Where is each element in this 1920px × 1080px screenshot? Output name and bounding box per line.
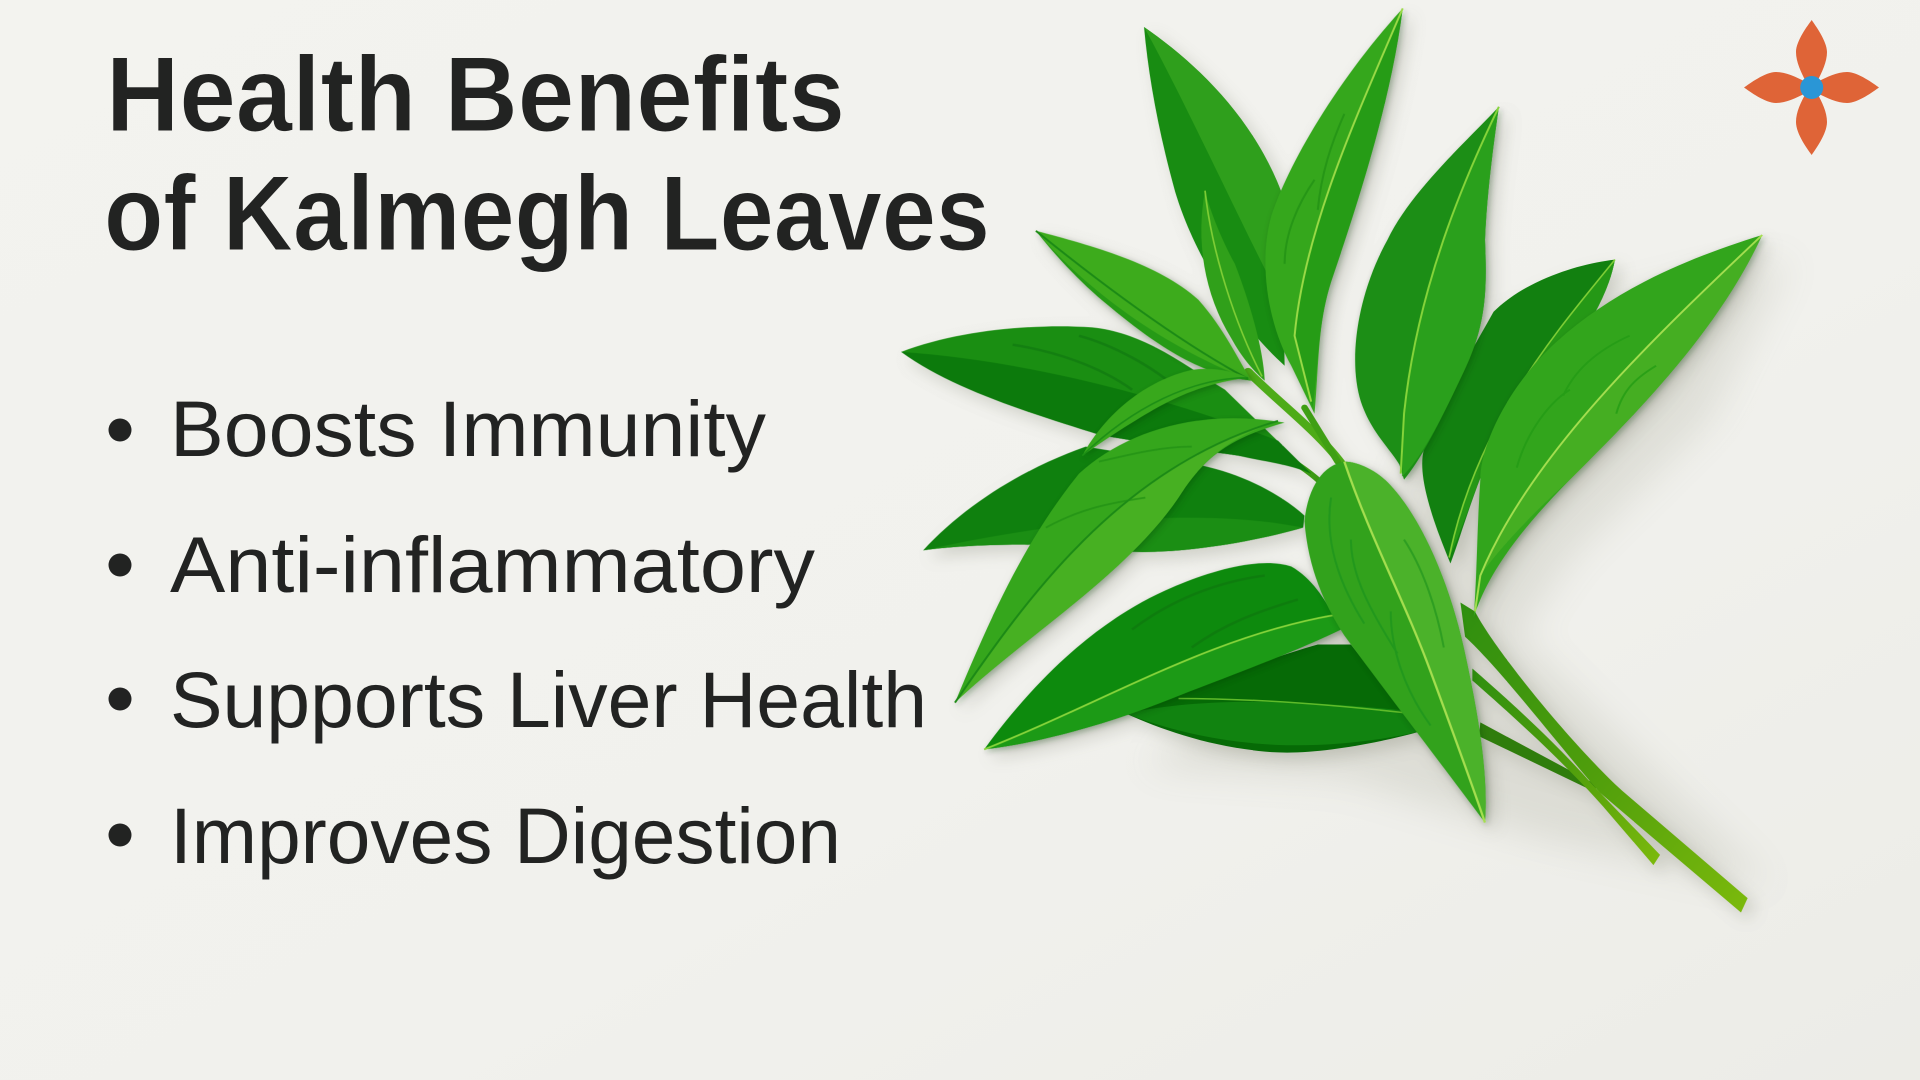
soft cast shadow: [1145, 258, 1789, 887]
leaf: top left long: [1144, 27, 1285, 366]
petal: right: [1817, 72, 1879, 103]
petal: top: [1796, 20, 1827, 82]
item: anti-inflammatory: Anti-inflammatory: [170, 520, 816, 609]
logo: orange four-petal flower: [1744, 20, 1879, 155]
title: Health Benefits: [106, 34, 845, 154]
title: of Kalmegh Leaves: [104, 153, 990, 273]
plant: kalmegh sprig: [901, 8, 1762, 912]
leaf: upper left: [1036, 231, 1251, 381]
leaf: back bottom: [1125, 644, 1421, 753]
item: boosts immunity: Boosts Immunity: [170, 384, 767, 473]
leaf: small center: [1082, 369, 1248, 456]
leaf: narrow upright: [1201, 191, 1265, 381]
item: supports liver health: Supports Liver Health: [170, 655, 927, 744]
leaf: upper right-center: [1355, 107, 1499, 480]
petal: bottom: [1796, 93, 1827, 155]
logo center dot: [1800, 76, 1823, 99]
leaf: back right dark: [1422, 260, 1615, 564]
petal: left: [1744, 72, 1806, 103]
item: improves digestion: Improves Digestion: [170, 791, 841, 880]
upper stems: [1241, 372, 1341, 481]
leaf: far left top: [901, 326, 1311, 474]
leaf: far left lower: [923, 447, 1305, 552]
leaf: right large: [1474, 235, 1762, 617]
title: [104, 34, 990, 273]
leaf: big left: [955, 418, 1285, 703]
lower stems: [1460, 602, 1748, 912]
leaf: lower left: [984, 563, 1341, 749]
leaf: front center: [1305, 462, 1486, 823]
benefits list: [108, 384, 927, 880]
leaf: top center: [1265, 8, 1403, 414]
